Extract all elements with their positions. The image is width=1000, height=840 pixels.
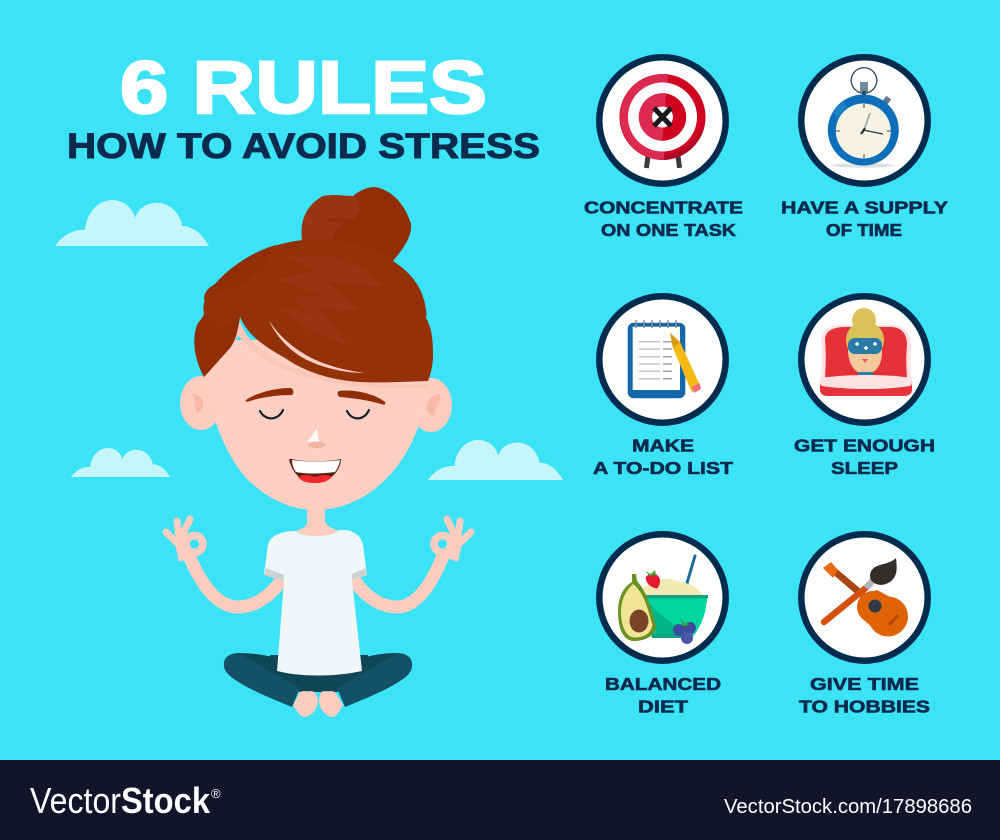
- cloud: top left: [55, 200, 209, 246]
- label: HAVE A SUPPLY: [781, 198, 949, 218]
- arm and hand: right: [355, 519, 471, 607]
- arm and hand: left: [166, 519, 281, 607]
- footer bar: [0, 760, 1000, 840]
- rule 3: make a to-do list: [593, 296, 734, 478]
- title: HOW TO AVOID STRESS: [67, 127, 540, 166]
- closed eyes: [260, 410, 369, 418]
- icon: target: [599, 57, 726, 184]
- icon: stopwatch: [801, 57, 928, 184]
- mouth: [289, 459, 341, 483]
- footer url: VectorStock.com/17898686: [724, 796, 972, 818]
- icon: sleeping woman with mask: [801, 296, 928, 423]
- character: meditating woman: [166, 187, 471, 717]
- forehead shadow: [204, 322, 428, 388]
- icon: notepad and pencil: [599, 296, 726, 423]
- hair: [194, 239, 433, 382]
- label: BALANCED: [605, 674, 721, 694]
- cloud: lower left: [71, 448, 170, 477]
- rule 4: get enough sleep: SLEEP: [831, 458, 898, 478]
- rule 5: balanced diet: [599, 534, 726, 716]
- rule 2: have a supply of time: [781, 57, 949, 240]
- footer logo: Vector: [30, 780, 121, 821]
- cloud: right: [428, 440, 563, 480]
- nose: [307, 429, 326, 448]
- label: GIVE TIME: [810, 674, 919, 694]
- eyebrows: [246, 388, 385, 405]
- neck: [295, 505, 340, 536]
- title: [67, 46, 540, 166]
- ears: [180, 376, 452, 432]
- t-shirt: [264, 530, 367, 676]
- feet: [293, 691, 343, 717]
- rule 1: concentrate on one task: [584, 57, 743, 240]
- face: [205, 340, 428, 510]
- rule 4: get enough sleep: [794, 296, 935, 478]
- rule 6: give time to hobbies: TO HOBBIES: [799, 696, 930, 716]
- rule 1: concentrate on one task: ON ONE TASK: [601, 220, 737, 240]
- footer logo: [30, 780, 221, 821]
- footer logo: ®: [211, 786, 221, 801]
- label: GET ENOUGH: [794, 436, 935, 456]
- label: CONCENTRATE: [584, 198, 743, 218]
- hair bun: [302, 187, 411, 261]
- label: MAKE: [632, 436, 694, 456]
- title: 6 RULES: [120, 46, 487, 129]
- legs: [224, 653, 412, 707]
- icon: bowl, avocado and berries: [599, 534, 726, 661]
- rule 3: make a to-do list: A TO-DO LIST: [593, 458, 734, 478]
- rule 5: balanced diet: DIET: [638, 696, 689, 716]
- icon: guitar and paint brush: [801, 534, 928, 661]
- rule 6: give time to hobbies: [799, 534, 930, 716]
- footer logo: Stock: [121, 780, 211, 821]
- rule 2: have a supply of time: OF TIME: [826, 220, 902, 240]
